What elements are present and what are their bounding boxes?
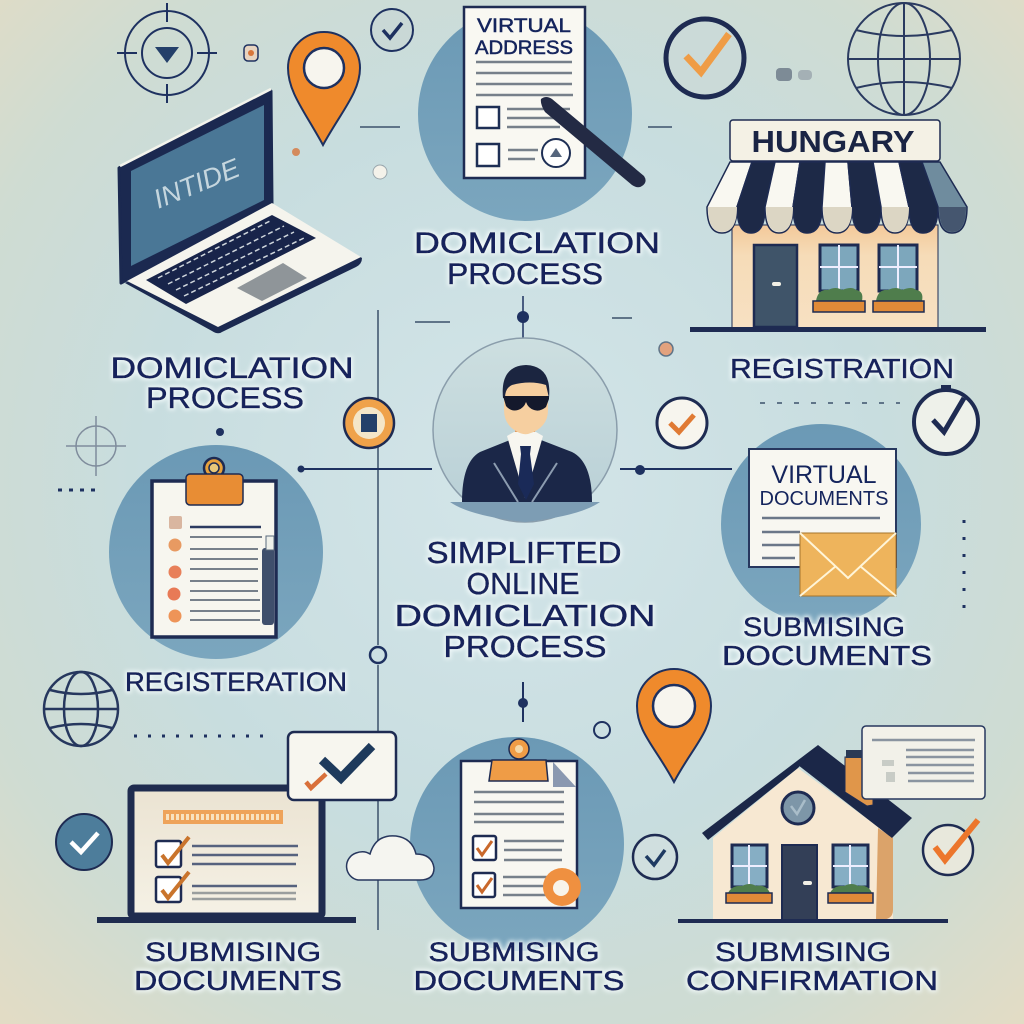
panel: virtual documents envelope: VIRTUAL — [771, 461, 877, 489]
panel: laptop — [119, 89, 362, 333]
heading: submitting confirmation: SUBMISING — [715, 937, 891, 967]
icon: target top left — [117, 3, 217, 103]
icon: check badge right — [657, 398, 707, 448]
icon: globe left — [44, 672, 118, 746]
heading: submitting documents right: SUBMISING — [743, 612, 905, 642]
flower boxes — [816, 288, 862, 301]
heading: registration left: REGISTERATION — [125, 667, 347, 697]
heading: domiciliation process top centre: PROCESS — [447, 258, 603, 291]
heading: submitting documents bottom centre — [414, 937, 624, 996]
panel: virtual documents envelope: DOCUMENTS — [760, 488, 888, 510]
heading: domiciliation process left: PROCESS — [146, 382, 304, 415]
icon: small orange tag — [244, 45, 258, 61]
icon: pen — [262, 548, 274, 625]
awning — [707, 162, 967, 233]
heading: domiciliation process top centre — [414, 227, 660, 291]
heading: domiciliation process top centre: DOMICLATION — [414, 227, 660, 260]
heading: submitting confirmation — [686, 937, 938, 996]
icon: seal — [543, 868, 581, 906]
heading: submitting documents right: DOCUMENTS — [722, 640, 932, 671]
panel: virtual address document: ADDRESS — [475, 38, 573, 59]
panel: virtual documents envelope — [721, 424, 921, 624]
heading: domiciliation process left — [110, 352, 354, 415]
icon: info card right — [862, 726, 985, 799]
heading: submitting documents bottom left — [134, 937, 342, 996]
connector lines — [58, 127, 964, 930]
heading: simplified online domiciliation process — [394, 535, 656, 664]
panel: storefront hungary: HUNGARY — [752, 124, 915, 159]
icon: globe top right — [848, 3, 960, 115]
panel: house — [678, 745, 948, 923]
panel: storefront hungary — [690, 120, 986, 332]
sign — [730, 120, 940, 161]
screen label: INTIDE — [149, 153, 245, 214]
heading: submitting confirmation: CONFIRMATION — [686, 965, 938, 996]
panel: submitting clipboard — [410, 737, 624, 951]
panel: virtual address document — [418, 7, 646, 221]
heading: submitting documents bottom left: SUBMISING — [145, 937, 321, 967]
heading: submitting documents bottom left: DOCUMENTS — [134, 965, 342, 996]
heading: simplified online domiciliation process: ONLINE — [466, 566, 580, 601]
icon: check circle right — [923, 820, 978, 875]
heading: domiciliation process left: DOMICLATION — [110, 352, 354, 385]
icon: clock check — [914, 385, 978, 454]
icon: orange location pin bottom — [637, 669, 711, 782]
panel: virtual address document: VIRTUAL — [477, 16, 571, 37]
heading: submitting documents bottom centre: SUBMISING — [428, 937, 600, 967]
icon: check speech card — [288, 732, 396, 800]
icon: check circle bottom left — [56, 814, 112, 870]
icon: small crosshair left — [66, 416, 126, 476]
windows — [820, 245, 858, 291]
panel: registration clipboard — [109, 445, 323, 659]
heading: simplified online domiciliation process: SIMPLIFTED — [426, 535, 622, 570]
heading: simplified online domiciliation process: PROCESS — [444, 629, 606, 664]
heading: submitting documents right — [722, 612, 932, 671]
door — [754, 245, 797, 327]
icon: large check circle — [666, 19, 812, 97]
heading: submitting documents bottom centre: DOCUMENTS — [414, 965, 624, 996]
panel: central person — [433, 338, 617, 522]
icon: small check circle bottom — [633, 835, 677, 879]
icon: orange location pin top — [288, 32, 360, 145]
icon: envelope — [800, 533, 896, 596]
icon: pen — [541, 97, 646, 187]
panel: monitor checklist — [97, 788, 356, 923]
heading: registration top right: REGISTRATION — [730, 353, 954, 384]
icon: cloud — [347, 836, 434, 880]
icon: small check circle top — [371, 9, 413, 51]
icon: orange badge left — [344, 398, 394, 448]
heading: simplified online domiciliation process: DOMICLATION — [394, 598, 656, 633]
